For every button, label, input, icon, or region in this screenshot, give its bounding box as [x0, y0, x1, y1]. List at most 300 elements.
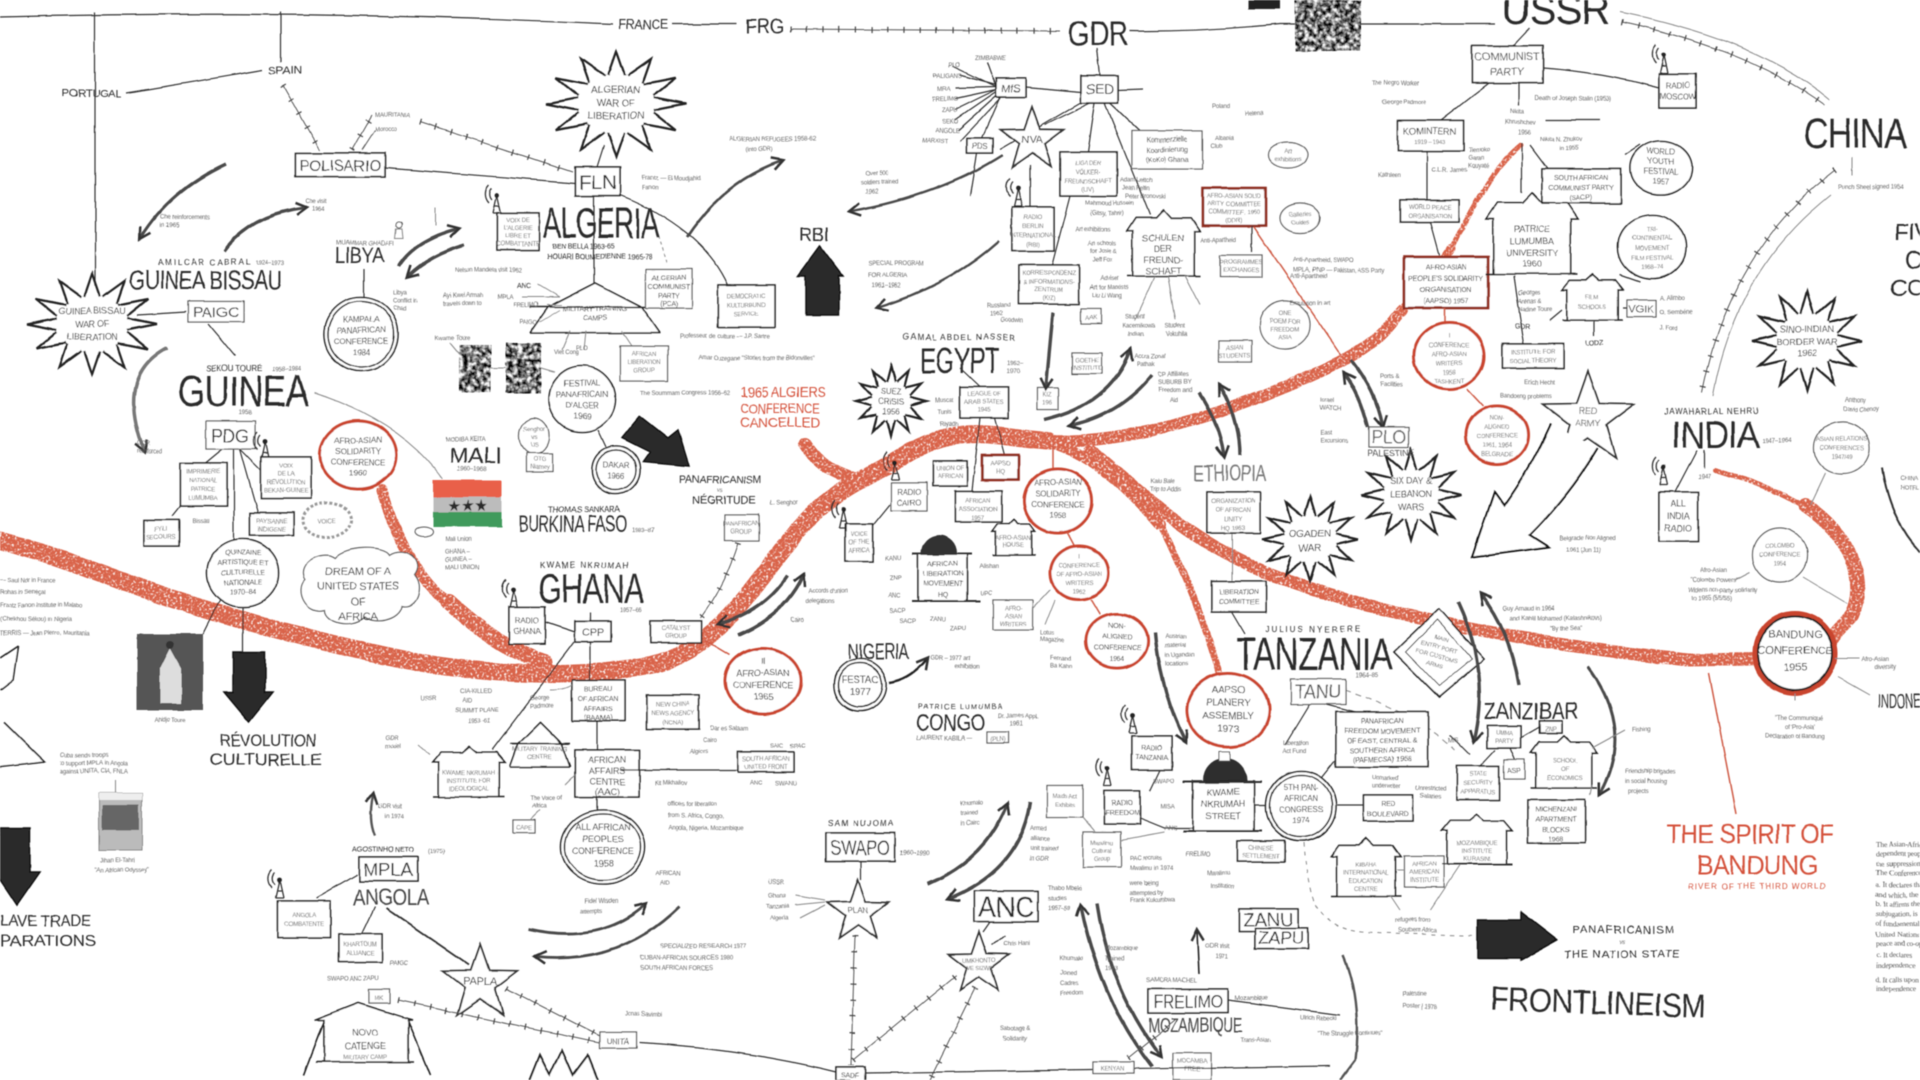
panel: Guinea: Bissau	[192, 519, 209, 525]
panel: Guinea: VOICE	[318, 519, 336, 525]
panel: GDR institutions: MfS	[1002, 83, 1020, 95]
panel: Tanzania: Unrestricted	[1415, 786, 1446, 792]
panel: Ghana: AFFAIRS	[589, 766, 625, 776]
panel: Libya: Chad	[393, 306, 407, 312]
panel: Kwame Nkrumah Street and radios: CHINESE	[1248, 846, 1274, 852]
panel: Algeria: COMBATTANTE	[496, 242, 540, 248]
panel: USSR institutions: Nikita	[1510, 109, 1525, 115]
panel: GDR institutions: FREUNDSCHAFT	[1064, 179, 1112, 185]
panel: PLO Palestine: East	[1320, 431, 1332, 437]
panel: Guinea: NATIONAL	[189, 478, 218, 484]
panel: Schools in Tanzania: refugees from	[1395, 918, 1431, 924]
panel: Zanzibar: and Kahlil Mohamed (Kalashnikovs)	[1510, 616, 1602, 622]
panel: Ethiopia: OF AFRICAN	[1216, 508, 1250, 514]
panel: Burkina Faso: BURKINA FASO	[518, 511, 627, 538]
panel: Congo: 1961	[1010, 722, 1024, 728]
panel: Kwame Nkrumah Street and radios: MISA	[1160, 804, 1174, 810]
callout: The Spirit of Bandung: BANDUNG	[1696, 850, 1818, 880]
panel: Zanzibar: MfS	[1448, 738, 1458, 744]
panel: Ghana: GDR	[385, 736, 399, 742]
panel: GDR institutions	[852, 48, 1202, 425]
panel: Egypt: AFRICA	[848, 548, 870, 554]
dark arrow: Révolution culturelle	[224, 652, 273, 722]
panel: Ghana: SUMMIT PLANE	[455, 708, 499, 714]
panel: Libya: PANAFRICAN	[336, 326, 386, 335]
text: Panafricanism vs Negritude	[679, 474, 798, 541]
panel: ANC and Umkhonto we Sizwe: Chris Hani	[1003, 941, 1030, 947]
panel: Zanzibar: SCHOOL	[1553, 758, 1578, 764]
panel: GDR institutions: KORRESPONDENZ	[1022, 271, 1076, 277]
panel: Kwame Nkrumah Street and radios: RADIO	[1111, 800, 1133, 807]
panel: African Liberation Movement HQ: AFRO-ASIAN	[995, 536, 1031, 542]
red box: Afro-Asian Solidarity Committee: EXCHANGES	[1223, 268, 1259, 274]
panel: Mali and flag: MODIBA KEITA	[445, 437, 486, 443]
panel: African Liberation Movement HQ: AFRO-	[1004, 606, 1022, 612]
panel: Panafrican links near Ghana: GROUP	[665, 634, 687, 640]
red box: Afro-Asian Solidarity Committee: ASIA	[1278, 335, 1292, 341]
text: Panafricanism vs the nation state: THE NATION STATE	[1564, 949, 1680, 961]
panel: GDR institutions: (LIV)	[1082, 187, 1094, 193]
red circle: Non-Aligned Conference 1964: NON-	[1108, 623, 1126, 630]
panel: Libya: MUAMMAR GHADAFI	[336, 241, 395, 247]
panel: GDR institutions: Goodwin	[1000, 318, 1023, 324]
red circle: II Afro-Asian Conference 1965: 1965	[753, 692, 773, 702]
panel: Ghana: RADIO	[515, 616, 539, 625]
panel: Ghana: (BAAMA)	[584, 715, 612, 722]
panel: Algeria: DEMOCRATIC	[727, 294, 766, 300]
panel: Congo: Dr. James Appl.	[998, 714, 1039, 720]
panel: SWAPO and PLAN: Tanzania	[766, 904, 790, 910]
panel: Frelimo Mozambique: GDR visit	[1205, 944, 1230, 950]
panel: ANC and Umkhonto we Sizwe: ANC	[978, 892, 1034, 924]
label: FRG: FRG	[745, 16, 784, 38]
panel: USSR institutions: 1957	[1652, 177, 1670, 186]
panel: Frelimo Mozambique	[1060, 903, 1340, 1080]
panel: Panafrican links near Ghana: offices for liberation	[668, 802, 717, 808]
panel: Ethiopia: ETHIOPIA	[1193, 460, 1267, 486]
arrows: Guinea Bissau and Che: 1964	[312, 207, 326, 213]
panel: Egypt: AFRICAN	[937, 474, 963, 480]
boxes: ZANU and ZAPU: ZANU	[1243, 910, 1293, 930]
panel: Angola: Jonas Savimbi	[625, 1012, 662, 1018]
panel: PLO Palestine: Excursions	[1320, 439, 1348, 445]
red circle: Afro-Asian Solidarity Conference 1960: AFRO-ASIAN	[334, 436, 382, 445]
red circle: Non-Aligned Conference 1964: 1964	[1109, 656, 1125, 663]
panel: Ethiopia: LIBERATION	[1219, 589, 1259, 596]
bottom map line with SADF and Kenyan boxes: KENYAN	[1101, 1067, 1125, 1073]
panel: Kwame Nkrumah Street and radios: SWAPO	[1153, 779, 1175, 785]
panel: Algeria: SERVICE	[733, 312, 759, 318]
panel: Libya: CONFERENCE	[334, 337, 388, 346]
panel: USSR institutions: (SACP)	[1570, 195, 1592, 202]
burst: Ogaden war: OGADEN	[1289, 529, 1331, 540]
panel: GDR institutions: MARXIST	[922, 139, 948, 145]
panel: Western Sahara Polisario: POLISARIO	[299, 158, 381, 175]
panel: India: INDIA	[1666, 511, 1690, 521]
panel: Schools in Tanzania: KURASINI	[1463, 857, 1491, 863]
panel: ANC and Umkhonto we Sizwe	[928, 801, 1081, 1080]
panel: Panafrican links near Ghana: (NCNA)	[663, 720, 683, 726]
panel: Zanzibar: APARTMENT	[1535, 817, 1577, 824]
panel: Kwame Nkrumah Street and radios: Maids Act	[1053, 794, 1078, 800]
panel: USSR institutions: 1968–74	[1641, 265, 1664, 271]
panel: ANC and Umkhonto we Sizwe: WE SIZWE	[964, 966, 994, 972]
panel: ANC and Umkhonto we Sizwe: Solidarity	[1003, 1036, 1027, 1042]
panel: Algeria: Nelson Mandela visit 1962	[455, 268, 523, 274]
panel: Schools in Tanzania	[1331, 815, 1513, 934]
red circle: I Conference of Afro-Asian Writers: CONFERENCE	[1059, 563, 1100, 569]
panel: Algeria: MPLA	[497, 295, 513, 301]
panel: Frelimo Mozambique: FRELIMO	[1153, 992, 1223, 1012]
panel: Nigeria and FESTAC: exhibition	[955, 664, 979, 670]
panel: Angola: in 1974	[385, 814, 405, 820]
panel: Kwame Nkrumah Street and radios: ANC	[1165, 826, 1178, 832]
red circle: I Conference of Afro-Asian Writers 1958 Tashkent: WRITERS	[1436, 361, 1463, 367]
panel: Kwame Nkrumah Street and radios: NKRUMAH	[1201, 799, 1245, 809]
panel: USSR institutions: CONTINENTAL	[1632, 236, 1673, 242]
panel: GDR institutions: Freedom and	[1158, 388, 1192, 394]
heading: Frontlineism: FRONTLINEISM	[1490, 980, 1706, 1024]
circle: Colombo Conference 1954	[1688, 528, 1848, 604]
panel: Mali and flag: MALI UNION	[445, 565, 479, 571]
red circle: Afro-Asian Solidarity Conference 1960	[320, 421, 396, 489]
panel: magazines and Algiers festival: Senghor	[523, 427, 545, 433]
panel: Mali and flag: MALI	[449, 443, 502, 468]
panel: magazines and Algiers festival: OTG	[534, 457, 547, 463]
panel: USSR institutions: LODZ	[1585, 340, 1604, 347]
burst: Sino-Indian border war: 1962	[1797, 349, 1817, 359]
panel: magazines and Algiers festival: US	[530, 443, 538, 449]
panel: USSR institutions: in 1955	[1560, 146, 1580, 152]
panel: Kwame Nkrumah Street and radios	[1047, 705, 1285, 904]
panel: USSR institutions: MOVEMENT	[1635, 246, 1669, 252]
panel: USSR institutions: Kouyaté	[1468, 164, 1490, 170]
red circle: AAPSO Planery Assembly 1973	[1155, 633, 1269, 747]
panel: GDR institutions: GOETHE	[1075, 358, 1099, 364]
panel: Frelimo Mozambique: Khumalo	[1060, 956, 1084, 962]
circle: Quinzaine artistique et culturelle nationale: 1970–84	[230, 589, 256, 596]
panel: USSR institutions: Garan	[1468, 156, 1484, 162]
panel: Kwame Nkrumah Street and radios: Mwalimu	[1207, 871, 1230, 877]
panel: Panafrican links near Ghana: delegations	[805, 599, 834, 605]
red box: Afro-Asian Solidarity Committee: Anti-Apartheid	[1290, 274, 1326, 280]
panel: USSR institutions: WORLD PEACE	[1408, 205, 1452, 211]
panel: Algeria: LIBERATION	[627, 360, 661, 366]
panel: GDR institutions: Accra Zonal	[1135, 354, 1166, 360]
circle: Quinzaine artistique et culturelle nationale: NATIONALE	[224, 580, 262, 587]
text: Panafricanism vs Negritude: GROUP	[730, 530, 752, 536]
panel: Algeria: PARTY	[658, 293, 680, 300]
panel: Angola: CATENGE	[344, 1041, 386, 1051]
panel: Frelimo Mozambique: 1973	[1105, 966, 1119, 972]
red circle: Afro-Asian Solidarity Conference 1958: SOLIDARITY	[1035, 489, 1082, 498]
panel: Tanzania: RED	[1381, 801, 1395, 808]
panel: Panafrican links near Ghana: SOUTH AFRICAN	[742, 757, 790, 763]
red circle: AAPSO Planery Assembly 1973: AAPSO	[1211, 685, 1245, 696]
panel: Frelimo Mozambique: Joined	[1060, 971, 1077, 977]
panel: Egypt: 1956	[882, 407, 900, 416]
red text: 1965 Algiers conference cancelled: CANCELLED	[740, 414, 820, 430]
panel: SWAPO and PLAN: Algeria	[770, 916, 789, 922]
panel: magazines and Algiers festival: DAKAR	[603, 461, 630, 470]
cloud: dream of a United States of Africa	[301, 548, 419, 624]
panel: GDR institutions: PALIGANG	[933, 74, 963, 80]
panel: Ghana: INSTITUTE FOR	[447, 779, 492, 785]
panel: African Liberation Movement HQ: AFRICAN	[928, 561, 958, 568]
panel: Algeria: MILITARY TRAINING	[563, 306, 627, 313]
text block: Bandung final communiqué excerpt: and which, the	[1876, 890, 1919, 899]
panel: Libya: LIBYA	[335, 243, 385, 268]
panel: Congo: LAURENT KABILA —	[916, 736, 972, 742]
panel: GDR institutions: Mahmoud Hussein	[1085, 201, 1133, 207]
panel: SWAPO and PLAN: 1960–1990	[900, 851, 930, 857]
panel: Guinea: FYLI	[155, 527, 168, 533]
panel: African Liberation Movement HQ: ANC	[888, 593, 901, 599]
text notes at left edge: Frantz Fanon Institute in Malabo	[0, 603, 83, 609]
panel: GDR institutions: PDS	[972, 142, 988, 151]
panel: Egypt	[831, 333, 1053, 561]
bottom map line with SADF and Kenyan boxes: SADF	[841, 1073, 859, 1080]
panel: Frelimo Mozambique: MOCAMBA	[1177, 1059, 1207, 1065]
panel: Egypt: RADIO	[897, 488, 921, 497]
panel: ANC and Umkhonto we Sizwe: Thabo Mbeki	[1048, 886, 1081, 892]
panel: Zanzibar: MICHENZANI	[1535, 807, 1577, 814]
panel: African Liberation Movement HQ: ZANU	[930, 617, 946, 623]
panel: Guinea: PATRICE	[191, 487, 215, 493]
panel: Panafrican links near Ghana: SAIC	[770, 744, 784, 750]
panel: Nigeria and FESTAC: 1977	[849, 687, 871, 698]
panel: Frelimo Mozambique: Mozambique	[1105, 946, 1139, 952]
panel: Guinea	[144, 364, 443, 560]
red text: 1965 Algiers conference cancelled	[740, 384, 826, 430]
panel: Schools in Tanzania: INTERNATIONAL	[1343, 871, 1390, 877]
panel: GDR institutions: Art exhibitions	[1075, 227, 1111, 233]
star: Red Army: ARMY	[1575, 418, 1601, 428]
panel: Guinea: GUINEA	[178, 367, 309, 416]
panel: Angola: CUBAN-AFRICAN SOURCES 1980	[640, 956, 733, 962]
panel: GDR institutions: Aid	[1170, 398, 1178, 404]
panel: Ghana: CENTRE	[589, 777, 625, 787]
panel: Algeria: Fanon	[642, 186, 658, 192]
dark arrow: slave trade reparations: PARATIONS	[0, 933, 96, 950]
panel: USSR institutions: Nadine Toure	[1518, 307, 1553, 313]
panel: Mali and flag	[415, 437, 502, 571]
photograph: Ahmed Sékou Touré in robes	[137, 634, 203, 724]
panel: Guinea: VOIX	[279, 464, 293, 470]
red box: Afro-Asian Solidarity Committee	[1200, 104, 1341, 362]
red box: Afro-Asian Solidarity Committee: FREEDOM	[1270, 327, 1300, 333]
panel: magazines and Algiers festival: 1966	[607, 472, 625, 481]
panel: ANC and Umkhonto we Sizwe: UMKHONTO	[962, 958, 996, 964]
panel: GDR institutions: 1961–1962	[872, 283, 902, 289]
photo and note: African Odyssey: to support MPLA in Angola	[60, 761, 128, 767]
text block: Bandung final communiqué excerpt: independence	[1876, 984, 1916, 993]
panel: Ghana: MILITARY TRAINING	[512, 747, 568, 753]
panel: USSR institutions: Kathleen	[1378, 173, 1401, 179]
red circle: Non-Aligned Conference 1964	[1086, 614, 1148, 668]
barbed wire: China to India: Punch Sheel signed 1954	[1838, 185, 1904, 191]
panel: USSR institutions: 1960	[1522, 259, 1542, 269]
photograph: Ahmed Sékou Touré in robes: Ahidjo Toure	[154, 718, 187, 724]
panel: Algeria: Viet Cong	[554, 350, 579, 356]
panel: Angola: GDR visit	[378, 804, 403, 810]
diamond: Main entry port for customs arms: ARMS	[1425, 660, 1443, 671]
text: Five principles of coexistence	[1890, 219, 1920, 302]
panel: Egypt: 1957	[972, 516, 985, 522]
red text: 1965 Algiers conference cancelled: CONFERENCE	[741, 400, 819, 416]
panel: Libya	[324, 207, 465, 371]
panel: Angola: SOUTH AFRICAN FORCES	[640, 966, 713, 972]
red circle: II Afro-Asian Conference 1965: AFRO-ASIAN	[736, 668, 790, 678]
panel: Zanzibar	[1448, 595, 1676, 843]
panel: GDR institutions: (KIZ)	[1043, 296, 1055, 302]
red circle: AAPSO Planery Assembly 1973: material	[1165, 643, 1185, 649]
panel: USSR institutions: Ports &	[1380, 374, 1399, 380]
panel: Kwame Nkrumah Street and radios: FREEDOM	[1105, 810, 1139, 817]
panel: USSR institutions: Anti-Apartheid, SWAPO	[1293, 258, 1354, 264]
panel: USSR institutions: SCHOOLS	[1578, 305, 1606, 311]
panel: Tanzania: Salaries	[1420, 794, 1441, 800]
panel: African Liberation Movement HQ: HOUSE	[1003, 543, 1023, 549]
panel: Egypt: CRISIS	[878, 397, 904, 406]
panel: Tanzania: JULIUS NYERERE	[1265, 625, 1360, 634]
circle: Bandung Conference 1955: "The Communiqué	[1775, 716, 1824, 722]
arrows: Guinea Bissau and Che: Che reinforcements	[160, 215, 210, 221]
diamond: Main entry port for customs arms: MAIN	[1434, 635, 1449, 644]
barbed wire: China to India	[1702, 158, 1904, 396]
panel: SWAPO and PLAN	[766, 819, 956, 1065]
panel: Schools in Tanzania: KIBAHA	[1355, 863, 1377, 869]
panel: ANC and Umkhonto we Sizwe: unit trained	[1030, 846, 1058, 852]
panel: Guinea Bissau: reinforced	[137, 449, 162, 455]
panel: ANC and Umkhonto we Sizwe: studies	[1048, 896, 1066, 902]
panel: Algeria: PLO	[576, 346, 588, 352]
burst: Six Day and Lebanon wars: WARS	[1398, 502, 1424, 512]
red circle: I Conference of Afro-Asian Writers 1958 Tashkent: CONFERENCE	[1429, 343, 1470, 349]
red circle: Afro-Asian Solidarity Conference 1958: CONFERENCE	[1031, 500, 1085, 509]
panel: Algeria: (PCA)	[660, 301, 678, 308]
red circle: AAPSO Planery Assembly 1973: PLANERY	[1205, 698, 1251, 709]
text: Panafricanism vs the nation state: vs	[1619, 940, 1625, 946]
panel: ANC and Umkhonto we Sizwe: in GDR	[1030, 856, 1050, 862]
panel: USSR institutions: YOUTH	[1647, 157, 1675, 166]
circle: Colombo Conference 1954: to 1955 (5/5/55)	[1692, 596, 1733, 602]
panel: Burkina Faso: THOMAS SANKARA	[548, 505, 621, 514]
circle: Colombo Conference 1954: Widens non-party solidarity	[1688, 588, 1757, 594]
panel: Algeria: VOIX DE	[506, 218, 530, 224]
panel: African Liberation Movement HQ: ASIAN	[1004, 614, 1022, 620]
red circle: I Conference of Afro-Asian Writers	[1050, 546, 1108, 600]
panel: USSR institutions: COMMUNIST	[1474, 51, 1540, 63]
panel: USSR institutions: Facilities	[1380, 382, 1402, 388]
panel: Guinea: DE LA	[278, 472, 294, 478]
panel: African Liberation Movement HQ: Lotus	[1040, 631, 1054, 637]
panel: GDR institutions: SPECIAL PROGRAM	[868, 261, 924, 267]
panel: African Liberation Movement HQ: Fernand	[1050, 656, 1072, 662]
panel: Tanzania: FREEDOM MOVEMENT	[1344, 728, 1420, 735]
panel: Ghana: PEOPLES	[583, 834, 624, 844]
panel: GDR institutions: LIGA DER	[1075, 161, 1102, 167]
panel: Angola	[268, 795, 747, 1080]
text notes at left edge: Rohas in Senegal	[0, 590, 45, 596]
panel: GDR institutions: DER	[1154, 244, 1173, 254]
panel: Angola: MPLA	[363, 860, 413, 880]
panel: Panafrican links near Ghana: Cairo	[790, 618, 805, 624]
panel: USSR institutions: KOMINTERN	[1404, 126, 1456, 136]
panel: ANC and Umkhonto we Sizwe: Sabotage &	[1000, 1026, 1030, 1032]
panel: GDR institutions: (Gitsy, Tahrir)	[1090, 211, 1124, 217]
panel: USSR institutions: UNIVERSITY	[1506, 248, 1558, 258]
panel: Kwame Nkrumah Street and radios: RADIO	[1141, 745, 1163, 752]
panel: Ethiopia: UNITY	[1224, 517, 1242, 523]
red box: Afro-Asian Solidarity Committee: Guides	[1291, 220, 1309, 226]
panel: GDR institutions: Liu Li Wang	[1092, 293, 1122, 299]
panel: USSR institutions: C.L.R. James	[1432, 168, 1467, 174]
red circle: II Afro-Asian Conference 1965: II	[761, 656, 765, 666]
red circle: Afro-Asian Solidarity Conference 1960: CONFERENCE	[331, 458, 385, 467]
panel: GDR institutions: FOR ALGERIA	[868, 273, 907, 279]
panel: Nigeria and FESTAC: NIGERIA	[848, 639, 910, 664]
panel: GDR institutions: INTERNATIONAL	[1010, 233, 1057, 239]
panel: Libya: Libya	[393, 290, 408, 296]
arrows: Guinea Bissau and Che	[141, 164, 327, 251]
panel: Angola: MILITARY CAMP	[343, 1055, 387, 1061]
red circle: I Conference of Afro-Asian Writers: I	[1078, 554, 1080, 560]
panel: India	[1560, 398, 1920, 554]
panel: Ghana	[385, 561, 645, 884]
panel: Algeria: L'ALGERIE	[503, 226, 533, 232]
panel: GDR institutions: soldiers trained	[860, 180, 899, 186]
panel: magazines and Algiers festival	[435, 336, 640, 494]
panel: USSR institutions: O. Sembène	[1660, 310, 1693, 316]
dark arrow: slave trade reparations: LAVE TRADE	[0, 913, 91, 930]
panel: GDR institutions: Koordinierung	[1146, 147, 1188, 154]
red circle: II Afro-Asian Conference 1965	[725, 648, 801, 714]
panel: India: 1947	[1698, 474, 1711, 480]
panel: Schools in Tanzania: AMERICAN	[1409, 870, 1439, 876]
callout: The Spirit of Bandung: RIVER OF THE THIRD WORLD	[1688, 882, 1826, 891]
panel: Ghana: KWAME NKRUMAH	[540, 561, 628, 570]
panel: India: HOTEL	[1900, 486, 1920, 492]
panel: Kwame Nkrumah Street and radios: KWAME	[1207, 787, 1240, 797]
panel: GDR institutions: SCHULEN	[1142, 233, 1184, 243]
panel: Panafrican links near Ghana: CATALYST	[662, 626, 691, 632]
red circle: Non-Aligned Conference 1964: CONFERENCE	[1093, 645, 1141, 652]
panel: Tanzania: Act Fund	[1283, 749, 1306, 755]
panel: GDR institutions: KIZ	[1043, 393, 1052, 399]
panel: USSR institutions: Arenas &	[1518, 299, 1542, 305]
circle: Bandung Conference 1955: CONFERENCE	[1758, 645, 1832, 657]
panel: Mali and flag: 1960–1968	[458, 467, 487, 473]
panel: India: 1947–1964	[1762, 439, 1792, 445]
panel: Ghana: CAPE	[516, 826, 532, 832]
panel: PLO Palestine: WATCH	[1320, 406, 1341, 412]
panel: USSR institutions: ORGANISATION	[1420, 287, 1472, 294]
panel: GDR institutions: Art for Marxists	[1090, 285, 1129, 291]
panel: India: INDIA	[1672, 415, 1760, 457]
panel: ANC and Umkhonto we Sizwe: alliance	[1030, 836, 1050, 842]
diamond: Main entry port for customs arms: FOR CUSTOMS	[1415, 648, 1458, 665]
panel: Algeria	[443, 137, 816, 397]
panel: GDR institutions: NVA	[1021, 134, 1043, 146]
panel: Algeria: PAIGC	[520, 320, 538, 326]
house arrow: RBI	[798, 225, 843, 315]
panel: Zanzibar: ZANZIBAR	[1484, 698, 1578, 725]
panel: Algeria: ALGERIAN	[652, 275, 686, 282]
panel: USSR institutions: LUMUMBA	[1510, 236, 1554, 246]
circle: Quinzaine artistique et culturelle nationale: ARTISTIQUE ET	[218, 560, 269, 567]
panel: Tanzania	[1232, 612, 1476, 936]
